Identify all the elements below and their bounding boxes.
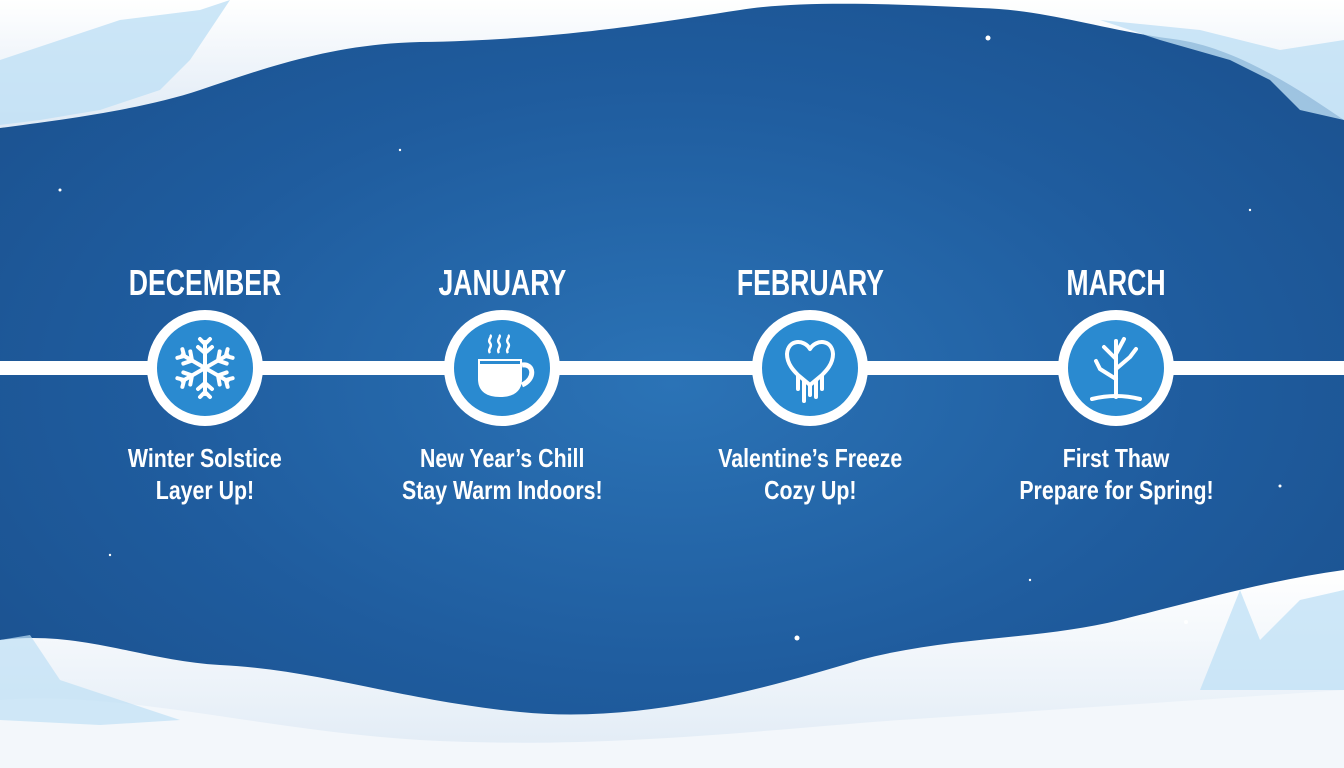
milestone: January: New Year’s Chill bbox=[420, 443, 584, 473]
milestone: February bbox=[718, 262, 902, 505]
milestone: March: Prepare for Spring! bbox=[1019, 475, 1213, 505]
icon: melting heart bbox=[752, 310, 868, 426]
milestone: February: Cozy Up! bbox=[764, 475, 856, 505]
milestone: January bbox=[402, 262, 602, 505]
milestone: February: Valentine’s Freeze bbox=[718, 443, 902, 473]
icon: coffee cup bbox=[444, 310, 560, 426]
milestone: December: Winter Solstice bbox=[128, 443, 282, 473]
milestone: January: JANUARY bbox=[438, 262, 566, 303]
milestone: March: First Thaw bbox=[1063, 443, 1169, 473]
top snow bbox=[0, 0, 1344, 128]
sparkles bbox=[58, 36, 1282, 640]
milestone: December bbox=[128, 262, 282, 505]
milestone: February: FEBRUARY bbox=[736, 262, 884, 303]
timeline line bbox=[0, 361, 1344, 375]
milestone: December: DECEMBER bbox=[129, 262, 281, 303]
milestone: January: Stay Warm Indoors! bbox=[402, 475, 602, 505]
milestone: March bbox=[1019, 262, 1213, 505]
icon: bare tree bbox=[1058, 310, 1174, 426]
bottom snow bbox=[0, 570, 1344, 768]
milestone: March: MARCH bbox=[1066, 262, 1166, 303]
icon: snowflake bbox=[147, 310, 262, 426]
milestone: December: Layer Up! bbox=[156, 475, 254, 505]
